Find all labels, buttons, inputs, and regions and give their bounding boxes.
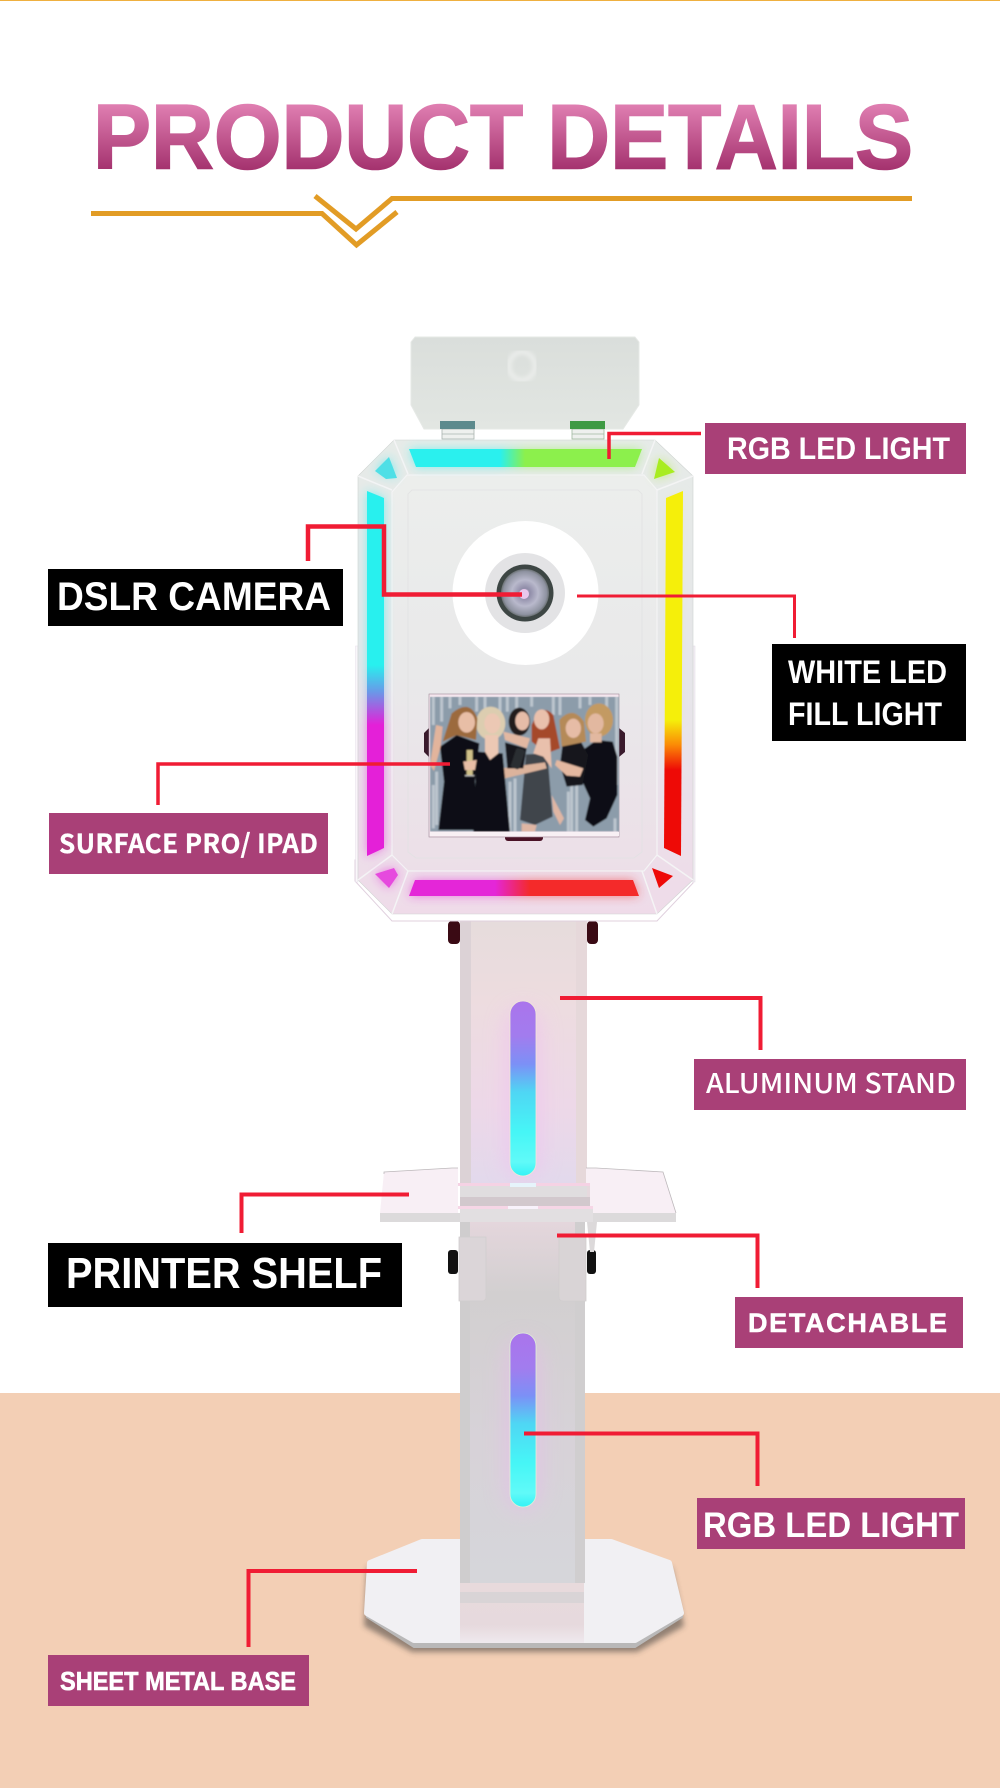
callout: RGB LED light (top): RGB LED LIGHT — [727, 430, 950, 466]
callout: sheet metal base — [48, 1571, 417, 1706]
frame mitre lines — [358, 440, 693, 914]
woman 2 — [473, 752, 510, 832]
woman 3 — [505, 742, 527, 768]
photo booth product — [355, 337, 695, 1652]
inner panel — [392, 475, 657, 871]
lower stand column — [460, 1222, 585, 1583]
lower RGB light slot — [505, 1333, 541, 1510]
printer shelf — [380, 1168, 676, 1222]
woman 5 — [560, 740, 588, 787]
white led fill light ring — [452, 521, 598, 665]
callout: sheet metal base: SHEET METAL BASE — [60, 1666, 296, 1696]
callout: RGB LED light (bottom): RGB LED LIGHT — [703, 1506, 959, 1545]
front frame — [358, 440, 693, 914]
callout: white LED fill light — [577, 596, 966, 741]
top accent line — [0, 0, 1000, 1]
top visor with hinges — [411, 337, 639, 439]
rgb led strip: top — [409, 449, 642, 467]
woman 1 — [438, 735, 479, 830]
title divider with chevrons — [91, 196, 912, 245]
led glow — [367, 449, 683, 896]
upper stand column — [460, 921, 587, 1186]
background: peach floor band — [0, 1393, 1000, 1788]
rgb led strip: right — [664, 491, 683, 856]
rgb led strip: bottom — [409, 880, 639, 896]
rear shell edge — [355, 860, 693, 921]
callout: aluminum stand: ALUMINUM STAND — [706, 1062, 956, 1101]
touch screen with party photo — [424, 694, 625, 841]
callout: printer shelf — [48, 1194, 409, 1307]
dslr camera lens — [496, 564, 554, 622]
rgb led strip: left — [367, 491, 384, 856]
callout: RGB LED light (bottom) — [524, 1434, 965, 1549]
callout: detachable — [557, 1236, 963, 1348]
callout: Surface Pro / iPad — [49, 764, 450, 874]
callout: white LED fill light: FILL LIGHT — [788, 696, 942, 732]
woman 6 — [579, 740, 617, 827]
title: PRODUCT DETAILS — [93, 86, 913, 188]
rgb led corners — [375, 457, 675, 888]
top mount knobs — [448, 921, 598, 944]
callout: white LED fill light: WHITE LED — [788, 654, 947, 690]
base plate — [364, 1542, 684, 1652]
booth head shell — [355, 440, 695, 921]
callout: printer shelf: PRINTER SHELF — [66, 1249, 382, 1298]
woman 4 — [520, 753, 553, 825]
upper RGB light slot — [505, 1001, 541, 1178]
callout: DSLR camera: DSLR CAMERA — [57, 575, 331, 619]
hinges — [440, 421, 605, 439]
detachable brackets and knobs — [448, 1222, 597, 1301]
callout: aluminum stand — [560, 998, 966, 1110]
callout: DSLR camera — [48, 526, 522, 626]
callout: detachable: DETACHABLE — [748, 1308, 947, 1338]
icon: visor ring logo — [509, 352, 535, 380]
callout: Surface Pro / iPad: SURFACE PRO/ IPAD — [59, 824, 318, 861]
callout: RGB LED light (top) — [609, 423, 966, 474]
